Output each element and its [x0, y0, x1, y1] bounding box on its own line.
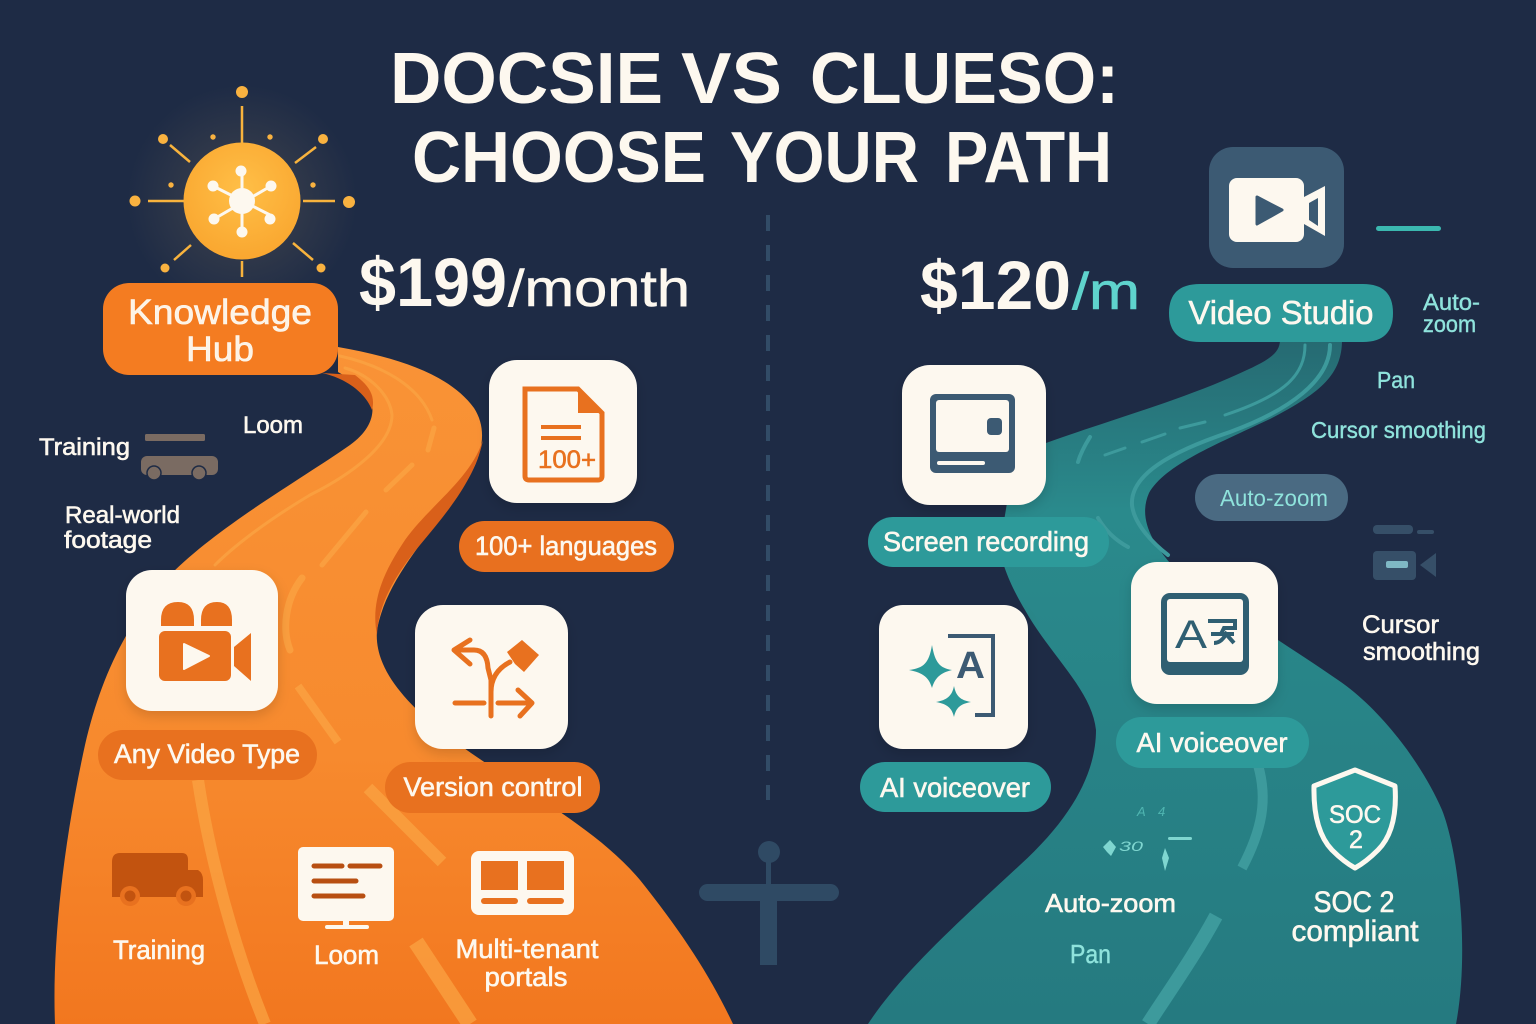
icon: faded auto-zoom glyphs	[1103, 804, 1192, 871]
pill: any video type	[98, 730, 317, 780]
icon: soc 2 shield: 2	[1349, 826, 1363, 854]
icon: training truck	[112, 853, 203, 906]
label: training: Training	[113, 935, 205, 965]
loose labels: left: Real-world	[65, 502, 180, 529]
loose labels: left: Training	[39, 434, 130, 461]
loose labels: left: footage	[64, 527, 152, 554]
orange road	[54, 347, 733, 1024]
pill: ai voiceover right: AI voiceover	[1136, 727, 1288, 758]
title	[390, 39, 1119, 198]
loose labels: right: Auto-	[1423, 289, 1480, 315]
card: any video type	[126, 570, 278, 711]
icon: loom monitor	[298, 847, 394, 929]
pill: auto-zoom faded	[1195, 474, 1348, 521]
label: auto-zoom and pan: Pan	[1070, 939, 1111, 969]
pill: 100+ languages: 100+ languages	[475, 531, 657, 561]
icon: faded auto-zoom glyphs: 30	[1119, 838, 1143, 854]
price: docsie	[359, 244, 690, 321]
price: clueso: /m	[1072, 263, 1140, 321]
icon: multi-tenant portals	[471, 851, 574, 915]
title: VS	[681, 39, 782, 119]
pill: ai voiceover left	[860, 762, 1051, 812]
icon: faded camera	[1373, 525, 1436, 580]
card: 100+ languages	[489, 360, 637, 503]
card: version control	[415, 605, 568, 749]
label: knowledge hub	[103, 283, 338, 375]
icon: faded auto-zoom glyphs: 4	[1158, 804, 1165, 819]
road shadow edges	[322, 373, 483, 635]
label: cursor smoothing: Cursor	[1362, 611, 1439, 639]
card: video studio icon	[1209, 147, 1344, 268]
label: soc 2 compliant: compliant	[1292, 915, 1419, 948]
card: ai voiceover right	[1131, 562, 1278, 704]
icon: soc 2 shield	[1314, 770, 1395, 868]
label: knowledge hub: Knowledge	[128, 293, 312, 332]
loose labels: left: Loom	[243, 412, 303, 439]
icon: knowledge hub sun	[127, 85, 357, 315]
loose labels: right: zoom	[1423, 311, 1476, 337]
card: screen recording	[902, 365, 1046, 505]
label: multi-tenant portals: portals	[484, 962, 568, 992]
pill: ai voiceover left: AI voiceover	[880, 772, 1030, 803]
price: docsie: $199	[359, 244, 507, 321]
title: YOUR	[730, 118, 919, 198]
card: ai voiceover left: A	[956, 645, 985, 687]
card: ai voiceover left	[879, 605, 1028, 749]
label: loom: Loom	[314, 940, 379, 970]
price: docsie: /month	[508, 260, 690, 318]
center divider	[766, 215, 770, 800]
loose labels: right: Pan	[1377, 367, 1415, 393]
title: CHOOSE	[412, 118, 706, 198]
icon: signpost	[699, 841, 839, 965]
label: soc 2 compliant: SOC 2	[1314, 886, 1394, 919]
title: PATH	[945, 118, 1112, 198]
pill: any video type: Any Video Type	[114, 739, 300, 769]
pill: screen recording: Screen recording	[883, 526, 1089, 557]
pill: screen recording	[868, 517, 1109, 567]
title: DOCSIE	[390, 39, 663, 119]
pill: video studio: Video Studio	[1188, 294, 1374, 331]
loose labels: left	[39, 412, 303, 554]
loose labels: right	[1311, 289, 1486, 443]
label: auto-zoom and pan	[1045, 888, 1176, 969]
pill: ai voiceover right	[1116, 717, 1309, 768]
accent dash	[1376, 226, 1441, 231]
label: cursor smoothing	[1362, 611, 1480, 666]
icon: faded auto-zoom glyphs: A	[1136, 804, 1146, 819]
label: soc 2 compliant	[1292, 886, 1419, 948]
road lane dashes	[1078, 345, 1330, 1024]
road lane dashes	[198, 356, 470, 1024]
icon: faded truck	[141, 434, 218, 480]
label: cursor smoothing: smoothing	[1363, 638, 1480, 666]
label: auto-zoom and pan: Auto-zoom	[1045, 888, 1176, 918]
card: ai voiceover right: A	[1175, 613, 1207, 657]
pill: video studio	[1169, 284, 1393, 342]
pill: version control: Version control	[404, 772, 582, 802]
teal road	[868, 340, 1462, 1024]
icon: soc 2 shield: SOC	[1329, 801, 1381, 829]
label: multi-tenant portals	[456, 934, 599, 992]
loose labels: right: Cursor smoothing	[1311, 417, 1486, 443]
title: CLUESO:	[810, 39, 1119, 119]
pill: 100+ languages	[459, 521, 674, 572]
pill: version control	[385, 762, 600, 813]
price: clueso: $120	[920, 247, 1071, 324]
pill: auto-zoom faded: Auto-zoom	[1220, 485, 1328, 511]
label: knowledge hub: Hub	[186, 330, 254, 369]
label: multi-tenant portals: Multi-tenant	[456, 934, 599, 964]
price: clueso	[920, 247, 1140, 324]
card: 100+ languages: 100+	[538, 446, 596, 474]
